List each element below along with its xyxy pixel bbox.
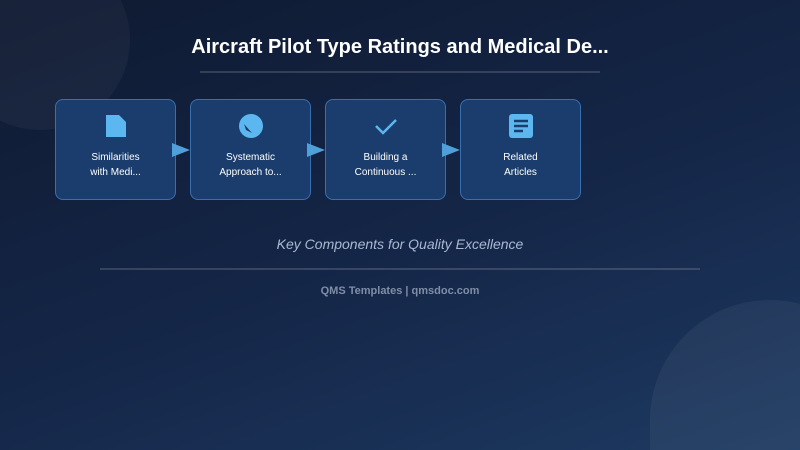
box: related [460,99,581,200]
arrow 3 [442,143,460,157]
box: systematic [190,99,311,200]
arrow 1 [172,143,190,157]
box: systematic: Approach to... [219,167,282,178]
box: similarities: with Medi... [90,167,141,178]
arrow 2 [307,143,325,157]
box: similarities [55,99,176,200]
box: systematic: Systematic [226,152,275,163]
title: Aircraft Pilot Type Ratings and Medical De... [191,36,609,58]
icon: check [375,119,397,135]
icon: compass [239,114,263,138]
subtitle: Key Components for Quality Excellence [277,236,523,252]
icon: article [509,114,533,138]
box: building [325,99,446,200]
box: related: Articles [504,167,537,178]
box: building: Building a [364,152,407,163]
box: similarities: Similarities [91,152,140,163]
footer: QMS Templates | qmsdoc.com [321,285,479,297]
box: building: Continuous ... [355,167,416,178]
icon: document [106,115,126,137]
box: related: Related [503,152,538,163]
